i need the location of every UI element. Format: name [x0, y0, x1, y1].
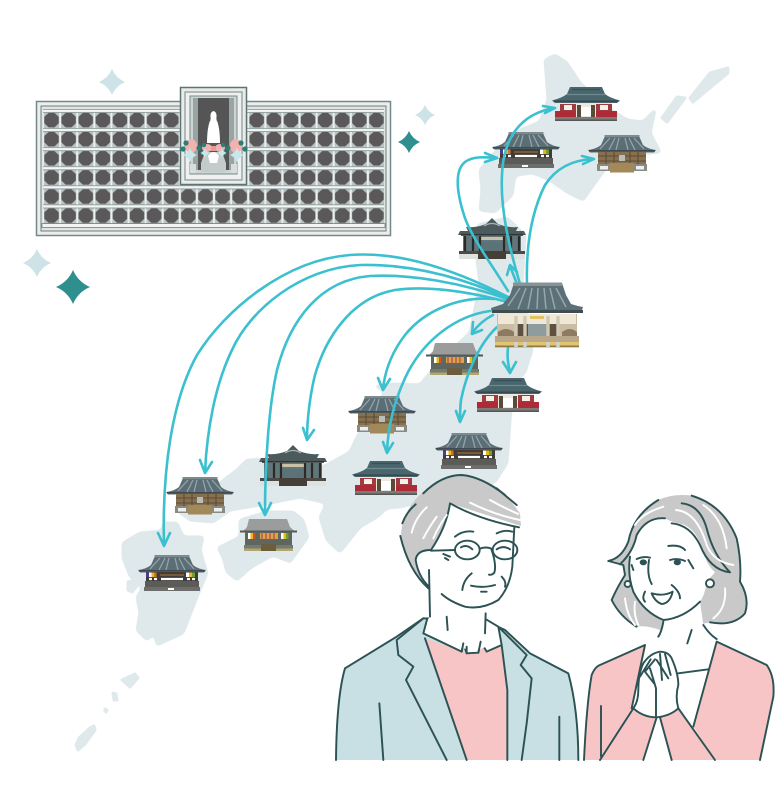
man: sweater edges	[425, 638, 507, 760]
woman: outlines	[584, 642, 774, 760]
altar	[201, 152, 226, 172]
arrow to Hokkaido east	[527, 156, 594, 284]
arrows from main temple	[158, 106, 594, 546]
bottom shelf	[42, 224, 385, 227]
wall inner edge	[41, 106, 386, 231]
flower garland	[180, 139, 248, 162]
man: collar fill	[427, 620, 498, 650]
man: glasses	[455, 541, 480, 559]
woman: hair	[608, 495, 747, 630]
main temple	[491, 282, 583, 347]
woman: hair highlights	[625, 505, 733, 625]
man: ear and jaw	[416, 527, 514, 617]
sparkle: light left	[23, 249, 51, 277]
Kyushu	[123, 523, 207, 645]
main islands	[123, 55, 660, 645]
arrow to Kanto east	[503, 348, 516, 373]
arrow to Hokkaido west	[458, 153, 508, 291]
woman: fingers	[640, 654, 671, 716]
woman: mouth	[652, 592, 673, 604]
man: sweater	[425, 638, 507, 760]
statue	[207, 111, 220, 143]
man: face details	[443, 531, 512, 592]
sparkle: light right	[415, 105, 435, 125]
man: sleeve lines	[379, 703, 559, 760]
woman: sleeves	[600, 708, 657, 760]
outlying islands	[76, 68, 728, 750]
man: neck fill	[429, 570, 487, 630]
woman	[584, 495, 774, 760]
arrow to Hokuriku	[378, 299, 494, 390]
man: head	[400, 475, 521, 633]
woman: cardigan left panel	[584, 645, 645, 760]
arrow to Tohoku south	[472, 315, 493, 334]
couple illustration	[336, 475, 774, 760]
woman: face details	[632, 546, 693, 602]
temple: Tohoku south	[426, 343, 483, 375]
sparkle: light top	[99, 69, 125, 95]
woman: cardigan right panel	[693, 642, 774, 760]
arrow to Hokkaido north	[502, 106, 555, 284]
woman: upper body	[584, 642, 774, 760]
temple: Kanto south	[435, 433, 503, 469]
wall frame	[36, 102, 390, 236]
temple: Hokkaido east	[588, 135, 656, 172]
columbarium wall	[36, 88, 390, 236]
man: hair highlights	[412, 500, 520, 538]
temple: Hokkaido north	[552, 87, 620, 121]
temple: Kansai	[259, 445, 327, 486]
central shrine	[180, 88, 248, 184]
man: neck lines	[447, 613, 486, 633]
sparkle: teal left	[56, 270, 90, 304]
man: shirt collar	[423, 618, 502, 653]
man: hair	[401, 475, 521, 588]
man: left lapel	[397, 618, 447, 760]
man	[336, 475, 578, 760]
Hokkaido	[480, 55, 660, 212]
arrow to Kanto south	[456, 327, 497, 422]
woman: neck lines	[658, 622, 717, 643]
woman: praying hands	[633, 652, 678, 717]
woman: neck	[657, 602, 703, 642]
temple: Shikoku	[240, 519, 297, 551]
temple: Hokuriku	[348, 396, 416, 434]
woman: earrings	[625, 581, 631, 587]
niche grid	[43, 109, 384, 224]
woman: jaw	[629, 557, 700, 620]
temple: Chubu	[352, 461, 420, 495]
Shikoku	[218, 512, 308, 580]
arrow to Kansai	[303, 288, 508, 440]
temple: Kanto east	[474, 378, 542, 412]
woman: hair outline	[608, 496, 747, 627]
man: right lapel	[500, 628, 532, 760]
arrow to Tohoku north	[507, 265, 517, 284]
arrow to Chugoku	[200, 265, 510, 473]
temple: Hokkaido west	[492, 132, 560, 168]
temple: Chugoku	[166, 477, 234, 514]
man: jacket	[336, 618, 578, 760]
sparkle: teal right	[398, 131, 420, 153]
woman: face	[630, 518, 715, 620]
man: collar front	[462, 642, 481, 653]
temple: Tohoku north	[458, 218, 526, 259]
woman: head	[608, 495, 747, 643]
woman: eyes	[641, 560, 646, 564]
arrow to Chubu	[383, 311, 490, 453]
arrow to Kyushu	[158, 254, 510, 546]
temple: Kyushu	[138, 555, 206, 591]
arrow to Shikoku	[259, 276, 510, 515]
map of Japan	[76, 55, 728, 750]
Honshu	[177, 218, 532, 552]
man: hair outline	[400, 475, 519, 588]
man: face	[416, 503, 515, 607]
